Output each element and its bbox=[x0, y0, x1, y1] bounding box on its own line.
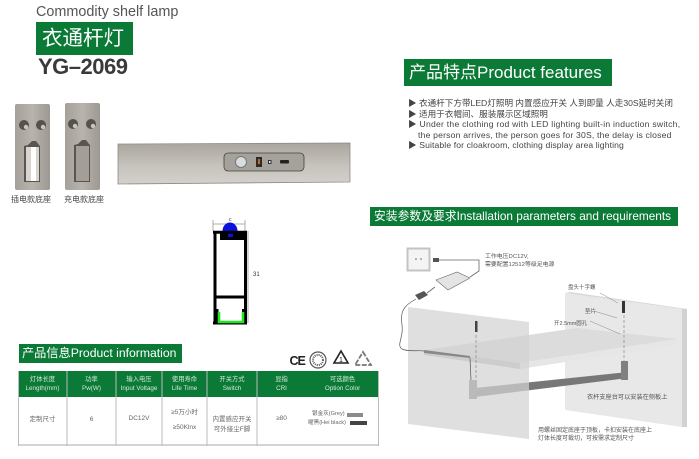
header: length: 灯体长度 bbox=[30, 376, 55, 383]
header: input voltage bbox=[121, 376, 158, 392]
cell: option colors bbox=[308, 410, 367, 426]
bracket note: 衣杆支座台可以安装在侧板上 bbox=[587, 393, 667, 401]
panel: product features list bbox=[408, 98, 680, 150]
header: option color: 可选颜色 bbox=[330, 376, 355, 383]
lamp bar with sensor panel bbox=[118, 143, 350, 184]
header: switch bbox=[219, 376, 245, 392]
header: CRI: CRI bbox=[276, 385, 287, 392]
swatch: grey bbox=[347, 413, 363, 417]
right wall panel bbox=[565, 292, 687, 427]
header: life time bbox=[172, 376, 197, 392]
bullet line 2: ▶ 适用于衣帽间、服装展示区域照明 bbox=[408, 109, 548, 119]
header: input voltage: 输入电压 bbox=[126, 376, 152, 383]
cell: switch: 可外接尘F脚 bbox=[214, 426, 250, 433]
fixing note: 灯体长度可裁切，可按需求定制尺寸 bbox=[538, 434, 634, 442]
CE mark: CE bbox=[290, 354, 306, 368]
bullet line 1: ▶ 衣通杆下方带LED灯照明 内置感应开关 人到即量 人走30S延时关闭 bbox=[408, 98, 673, 108]
header: input voltage: Input Voltage bbox=[121, 385, 157, 392]
header: CRI: 显指 bbox=[275, 376, 288, 383]
fixing note: 用螺丝固定底座于顶板，卡扣安装在底座上 bbox=[538, 426, 652, 434]
cell: power: 6 bbox=[90, 416, 93, 423]
cell: CRI: ≥80 bbox=[276, 415, 287, 422]
title banner: product name: 衣通杆灯 bbox=[42, 27, 124, 50]
leader lines bbox=[590, 293, 620, 334]
panel: installation heading: 安装参数及要求Installation parameters and requirements bbox=[374, 209, 671, 223]
hole label: 开2.5mm圆孔 bbox=[554, 319, 588, 327]
title banner: product name bbox=[36, 22, 133, 55]
cell: length: 定制尺寸 bbox=[30, 416, 56, 423]
option: silver: 银金灰(Grey) bbox=[312, 411, 345, 417]
round certification mark bbox=[310, 352, 326, 368]
certification icons bbox=[290, 350, 372, 369]
product photos: brackets and lamp bbox=[15, 103, 350, 190]
panel: product features heading: 产品特点Product features bbox=[409, 63, 602, 82]
cell: life time bbox=[171, 408, 198, 431]
cell: life time: ≥50Klnx bbox=[173, 424, 196, 431]
shelf board bbox=[424, 328, 677, 369]
washer label: 垫片 bbox=[585, 307, 596, 315]
hanging rail bbox=[469, 361, 628, 399]
recycling triangle 1: 1 bbox=[339, 357, 343, 364]
wall socket bbox=[408, 248, 430, 270]
header: life time: Life Time bbox=[172, 385, 197, 392]
header: switch: Switch bbox=[223, 385, 241, 392]
bracket: rechargeable base bbox=[65, 103, 100, 190]
header: option color: Option Color bbox=[325, 385, 360, 392]
bullet line 3 continued: the person arrives, the person goes for 30S, the delay is closed bbox=[418, 130, 672, 140]
header: switch: 开关方式 bbox=[219, 376, 245, 383]
caption: plug-in base: 插电款底座 bbox=[11, 195, 51, 204]
power note: 工作电压DC12V, bbox=[485, 252, 529, 260]
bullet line 4: ▶ Suitable for cloakroom, clothing display area lighting bbox=[408, 140, 624, 150]
model number: YG–2069 bbox=[38, 54, 127, 79]
power adapter and wires bbox=[400, 258, 479, 380]
table: product information bbox=[18, 371, 379, 446]
header: life time: 使用寿命 bbox=[172, 376, 197, 383]
recycling triangle outline bbox=[355, 352, 371, 365]
power note: 需要配置12512等级足电源 bbox=[485, 260, 555, 268]
header: power: 功率 bbox=[85, 376, 98, 383]
cell: life time: ≥5万小时 bbox=[171, 409, 198, 416]
caption: rechargeable base: 充电款底座 bbox=[64, 195, 104, 204]
header: power bbox=[82, 376, 101, 392]
cross-section profile diagram: 31 bbox=[253, 272, 260, 278]
header: option color bbox=[325, 376, 360, 392]
header: length bbox=[26, 376, 60, 392]
panel: product information heading: 产品信息Product information bbox=[22, 346, 176, 360]
swatch: black bbox=[350, 421, 367, 425]
header: length: Length(mm) bbox=[26, 385, 59, 392]
cell: voltage: DC12V bbox=[129, 415, 149, 422]
cell: switch: 内置感应开关 bbox=[212, 416, 252, 423]
cross-section profile diagram: c bbox=[229, 217, 232, 223]
left wall panel bbox=[408, 307, 529, 439]
option: black: 曜黑(Hei black) bbox=[308, 420, 346, 426]
panel: product features heading bbox=[404, 59, 612, 86]
panel: product information heading bbox=[19, 344, 182, 363]
header: power: Pw(W) bbox=[82, 385, 101, 392]
subtitle: Commodity shelf lamp: Commodity shelf lamp bbox=[36, 4, 178, 20]
screws and dashed guides bbox=[475, 301, 625, 380]
header: CRI bbox=[275, 376, 288, 392]
bullet line 3: ▶ Under the clothing rod with LED lighting built-in induction switch, bbox=[408, 119, 680, 129]
cell: switch bbox=[212, 416, 252, 433]
cross-section profile diagram bbox=[212, 217, 260, 324]
bracket: plug-in base bbox=[15, 104, 50, 190]
screw label: 盘头十字螺 bbox=[568, 283, 596, 291]
installation diagram bbox=[399, 248, 687, 442]
